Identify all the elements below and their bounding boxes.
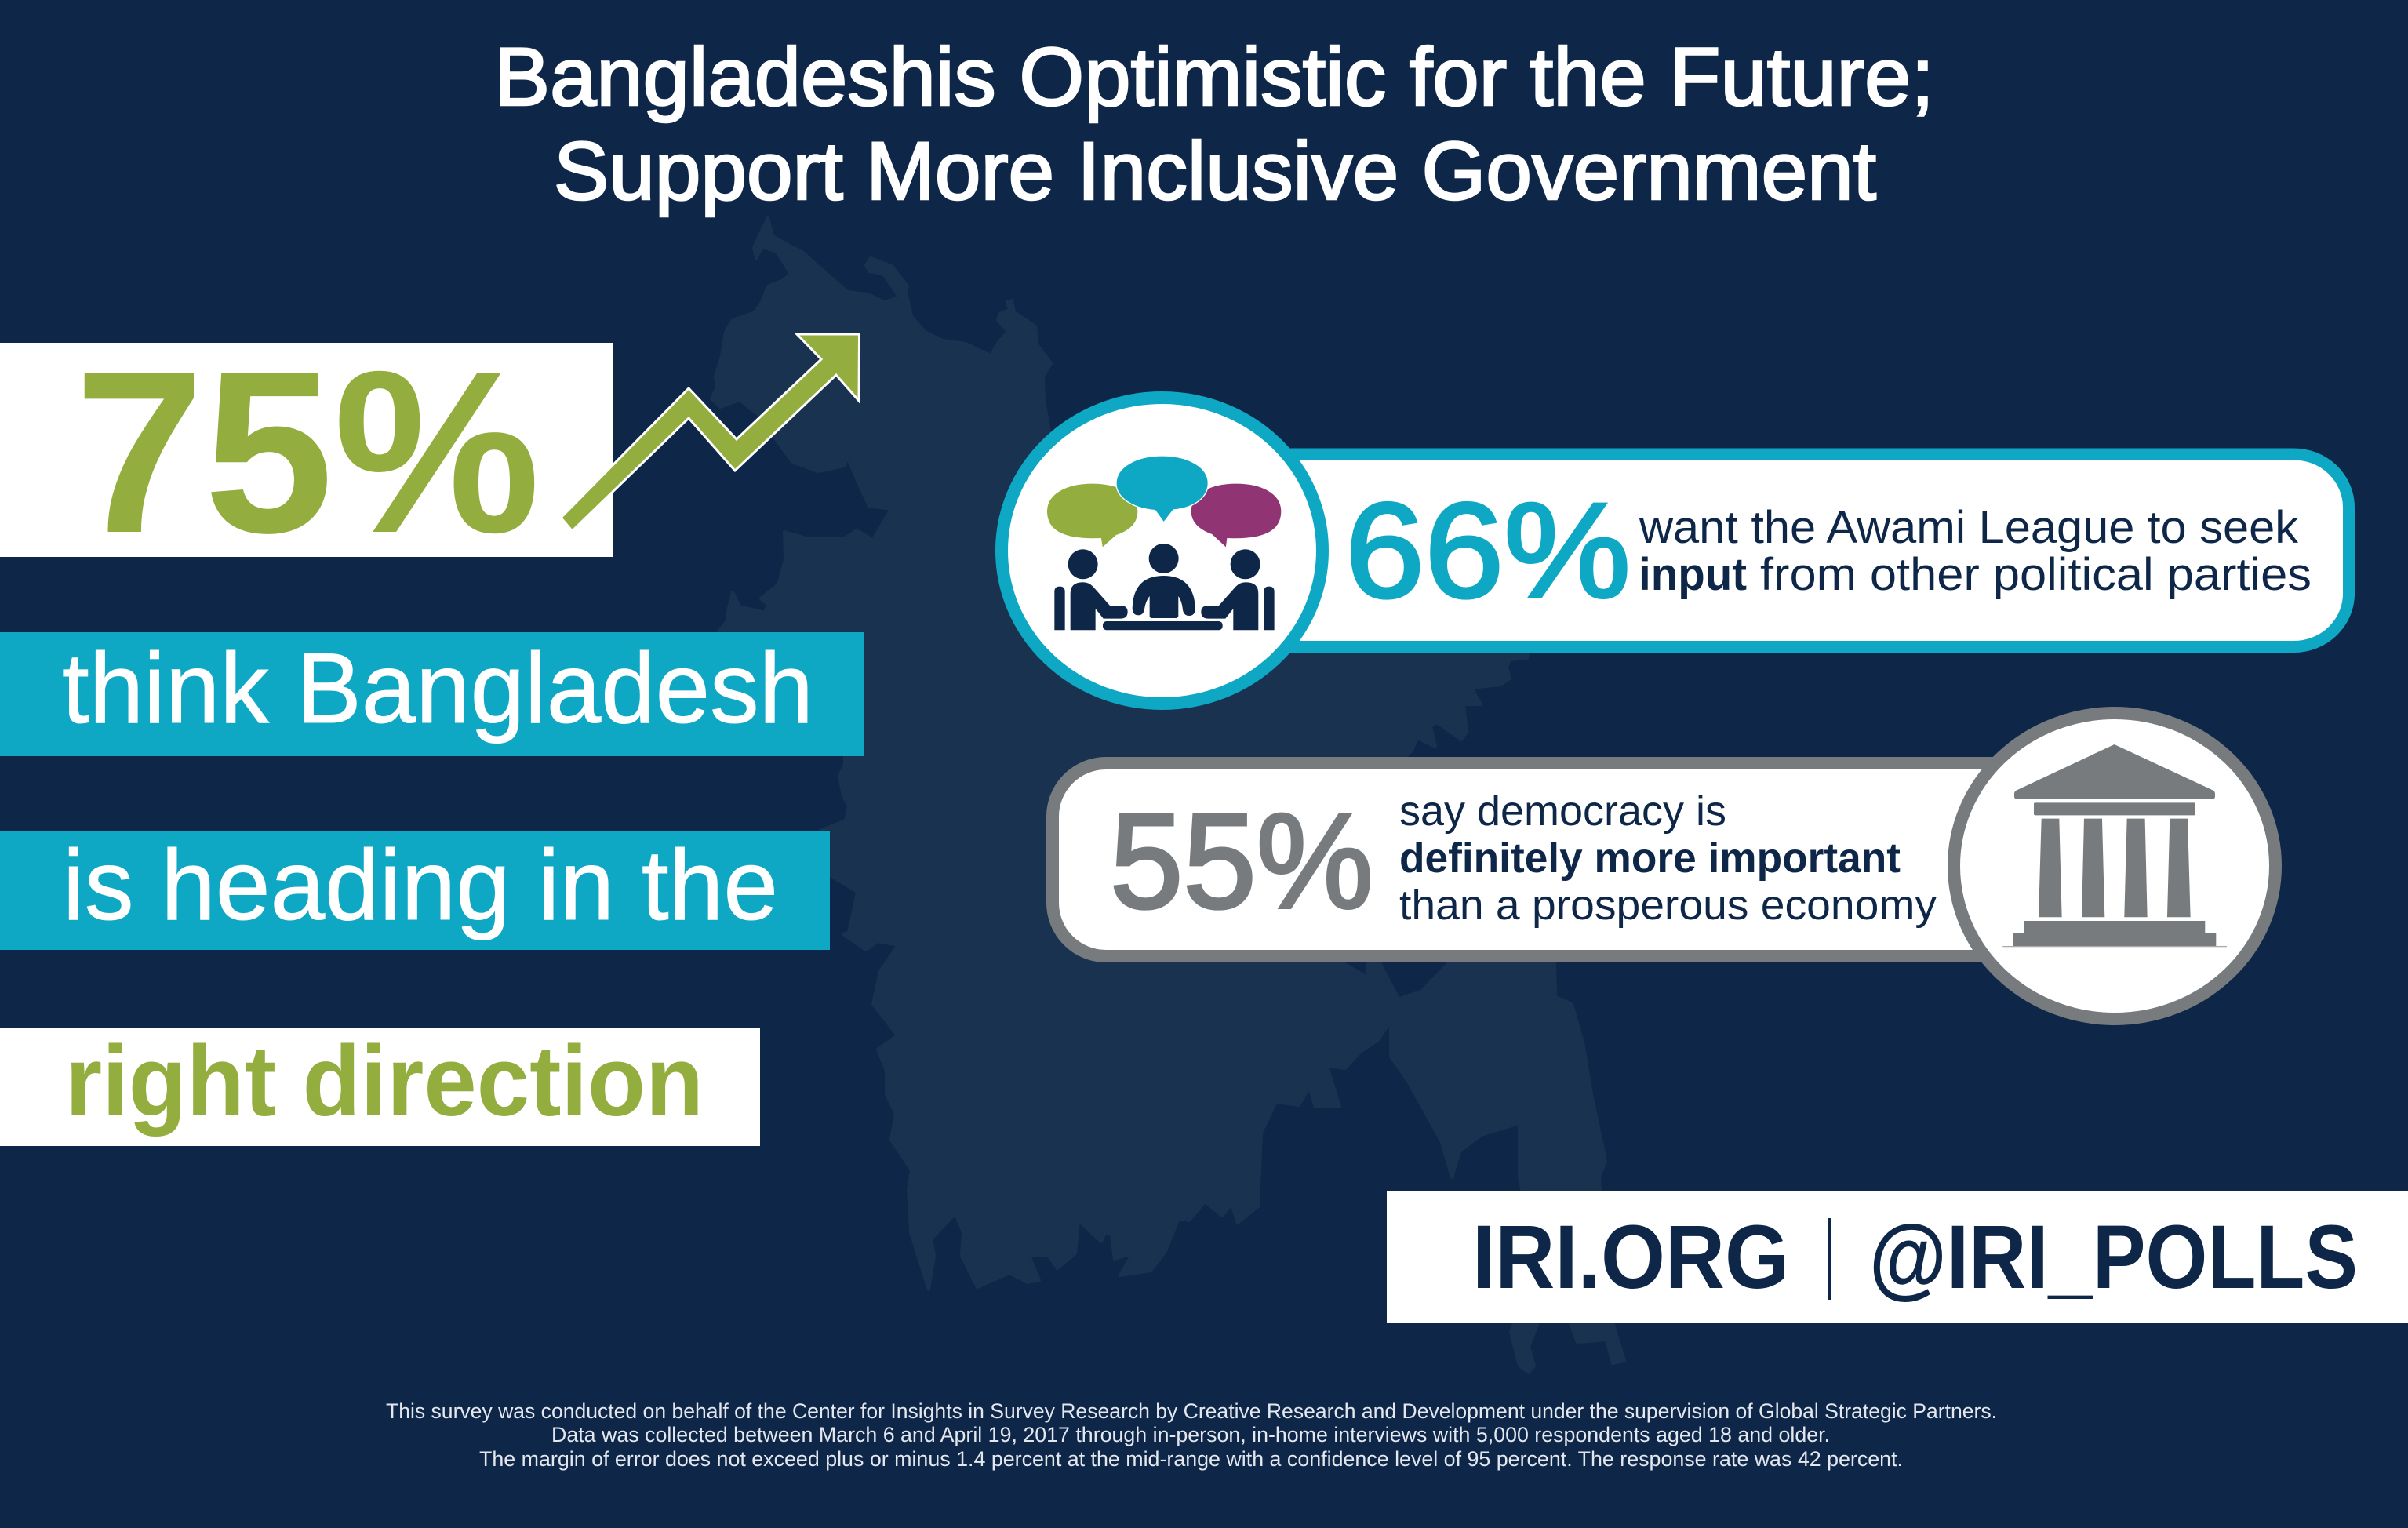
text: 55 percent description: say democracy is [1399,788,1726,835]
map of Bangladesh (background silhouette) [711,218,1624,1373]
footnote: Data was collected between March 6 and April 19, 2017 through in-person, in-home interviews with 5,000 respondents aged 18 and older. [551,1423,1830,1446]
panel: IRI links: @IRI_POLLS [1869,1207,2358,1308]
icon: rising arrow [561,334,860,531]
callout: 75 percent: 75% [75,322,540,581]
title [494,31,1934,217]
stat: 55 percent: 55% [1110,786,1373,937]
icon: government building circle [1954,713,2275,1019]
text: 66 percent description: want the Awami League to seek [1639,502,2299,553]
icon: discussion circle [1002,398,1322,704]
text: 66 percent description: input [1639,549,1747,600]
text: 55 percent description: than a prosperous economy [1399,882,1937,929]
panel: 66 percent pill [1177,454,2348,646]
text: 55 percent description [1399,788,1937,929]
text: 66 percent description [1639,502,2312,600]
banner: right direction: right direction [65,1025,704,1137]
panel: IRI links [1387,1191,2408,1323]
title: Bangladeshis Optimistic for the Future; [494,31,1934,123]
title: Support More Inclusive Government [554,126,1876,217]
footnote [386,1399,1997,1471]
banner: think Bangladesh: think Bangladesh [62,632,813,744]
panel: IRI links: IRI.ORG [1472,1207,1789,1308]
panel: 55 percent pill [1053,763,2072,956]
icon: speech bubbles [1046,456,1282,548]
text: 55 percent description: definitely more important [1399,835,1901,882]
banner: is heading in the: is heading in the [63,829,778,940]
footnote: The margin of error does not exceed plus or minus 1.4 percent at the mid-range with a confidence level of 95 percent. The response rate was 42 percent. [479,1447,1903,1471]
text: 66 percent description: from other political parties [1760,549,2312,600]
footnote: This survey was conducted on behalf of the Center for Insights in Survey Research by Creative Research and Development under the supervision of Global Strategic Partners. [386,1399,1997,1423]
stat: 66 percent: 66% [1345,475,1631,626]
icon: people at table [1054,544,1275,630]
